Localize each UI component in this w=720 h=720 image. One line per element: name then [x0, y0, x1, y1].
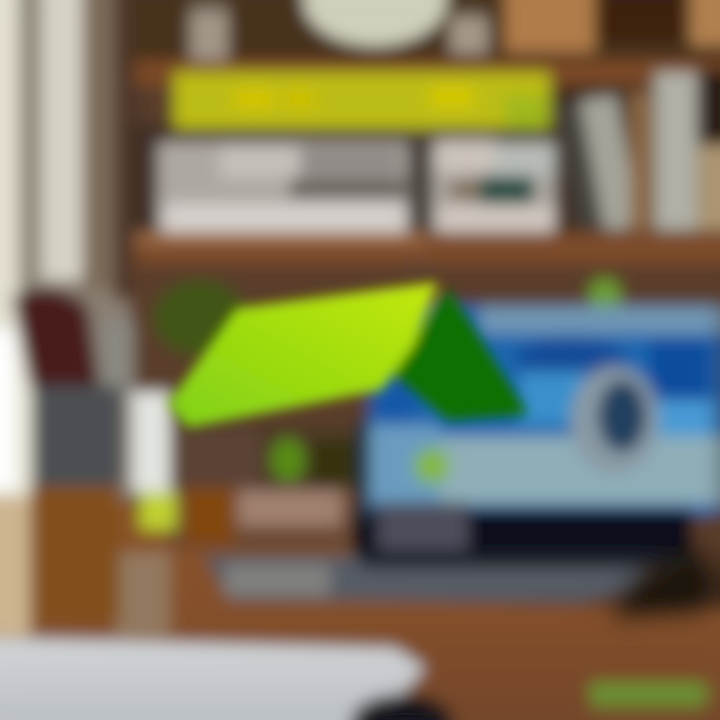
- laptop screen: [369, 306, 716, 514]
- lime green roof panel: [168, 282, 438, 428]
- upright books on the right: [555, 70, 720, 235]
- dark object at the bottom: [349, 694, 455, 720]
- upper shelf backdrop: [130, 0, 720, 322]
- top shelf board: [135, 60, 720, 86]
- green watermark at bottom right: [590, 682, 706, 706]
- roof icon: [168, 282, 528, 428]
- white text rows: [158, 135, 568, 270]
- white cup and yellow highlight: [132, 392, 176, 530]
- laptop keyboard: [205, 552, 680, 602]
- plant foliage: [154, 278, 621, 356]
- dark lower shadow: [612, 548, 720, 618]
- curtain on the left: [0, 0, 144, 520]
- desk surface: [0, 500, 720, 720]
- laptop base and screen bezel: [352, 330, 720, 560]
- yellow heading band: [174, 72, 550, 129]
- middle shelf board: [135, 232, 720, 264]
- wall clock: [190, 0, 488, 62]
- items under the roof: [172, 426, 365, 550]
- white paper at bottom left: [0, 638, 425, 720]
- dark green roof panel: [394, 288, 528, 420]
- vase with dried plant: [12, 288, 122, 622]
- wooden box top right: [505, 0, 720, 52]
